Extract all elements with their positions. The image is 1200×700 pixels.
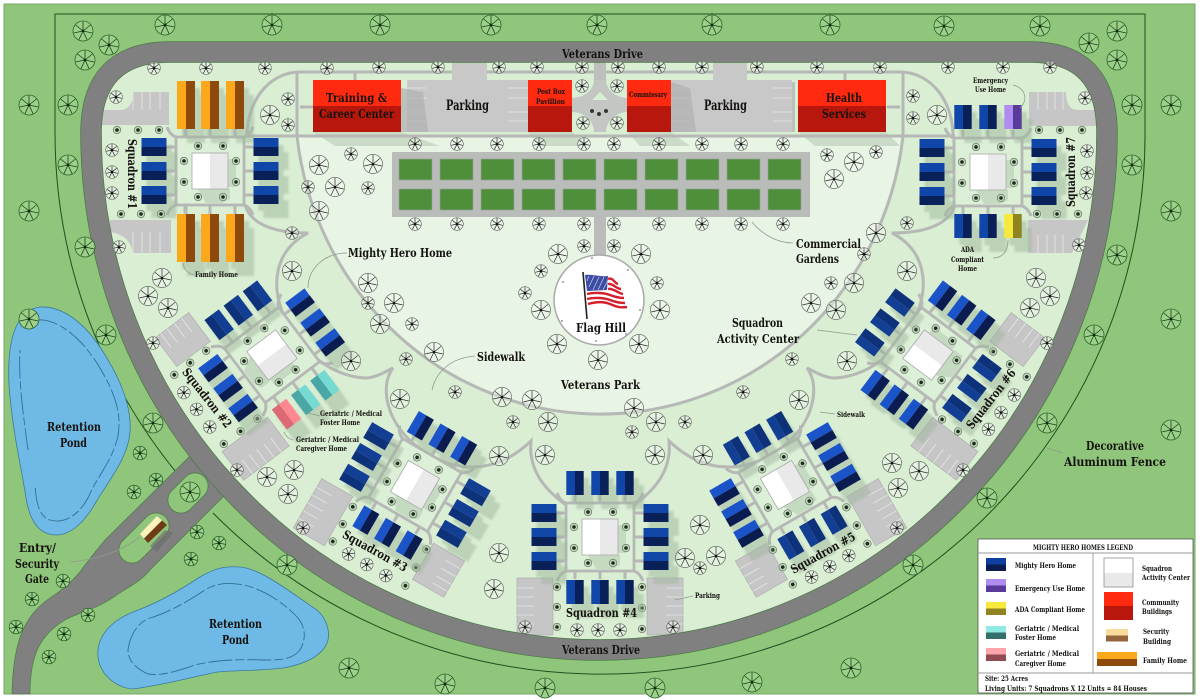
- legend item: security building: [1106, 627, 1172, 646]
- label: geriatric medical caregiver home: Caregiver Home: [296, 444, 347, 453]
- label: parking right: Parking: [704, 98, 747, 114]
- label: ada compliant home: [951, 245, 985, 273]
- security building: [140, 516, 173, 552]
- label: commercial gardens: Commercial: [796, 237, 861, 251]
- label: emergency use home: Use Home: [975, 85, 1006, 94]
- label: geriatric medical foster home: Foster Home: [320, 418, 360, 427]
- label: training and career center: Career Center: [319, 107, 395, 121]
- label: geriatric medical foster home: [320, 409, 382, 427]
- label: squadron activity center: [716, 316, 800, 346]
- label: decorative aluminum fence: [1063, 439, 1166, 469]
- label: geriatric medical caregiver home: [296, 435, 359, 453]
- label: squadron 3: Squadron #3: [340, 527, 410, 575]
- squadron 5: [693, 394, 907, 612]
- label: commissary: Commissary: [629, 90, 667, 99]
- label: emergency use home: [973, 76, 1009, 94]
- legend item: community buildings: [1104, 592, 1179, 620]
- building shadows: [313, 132, 900, 146]
- label: squadron 6: Squadron #6: [963, 366, 1019, 432]
- site lawn: [91, 52, 1107, 650]
- label: retention pond bottom: Retention: [209, 617, 262, 631]
- legend item: ada compliant home: [986, 602, 1085, 615]
- label: training and career center: [319, 91, 395, 121]
- building: post box pavillion: [528, 80, 572, 132]
- legend item: geriatric medical caregiver home: Geriatric / Medical: [1015, 649, 1079, 658]
- label: ada compliant home: ADA: [960, 245, 974, 254]
- legend footer: site summary: [985, 674, 1147, 693]
- label: post box pavillion: [536, 87, 565, 106]
- legend item: emergency use home: Emergency Use Home: [1015, 584, 1085, 593]
- legend item: family home: [1097, 652, 1187, 666]
- legend item: squadron activity center: [1104, 558, 1191, 587]
- label: sidewalk park: Sidewalk: [477, 350, 526, 364]
- label: commercial gardens: [796, 237, 861, 266]
- veterans drive road: [91, 52, 1107, 650]
- label: entry security gate: Security: [15, 557, 60, 571]
- label: ada compliant home: Home: [958, 264, 977, 273]
- label: squadron activity center: Squadron: [732, 316, 783, 330]
- label: retention pond bottom: [209, 617, 262, 647]
- legend item: geriatric medical foster home: [986, 624, 1079, 642]
- legend item: mighty hero home: Mighty Hero Home: [1015, 561, 1076, 570]
- legend item: ada compliant home: ADA Compliant Home: [1014, 605, 1085, 614]
- legend item: mighty hero home: [986, 558, 1076, 571]
- retention pond bottom: [98, 567, 329, 689]
- label: training and career center: Training &: [326, 91, 387, 105]
- label: retention pond left: Retention: [47, 420, 101, 434]
- label: parking left: Parking: [446, 98, 489, 114]
- label: squadron activity center: Activity Center: [716, 332, 800, 346]
- label: parking small: Parking: [695, 591, 721, 600]
- flag hill: [554, 255, 644, 345]
- squadron 2: [142, 261, 366, 481]
- label: post box pavillion: Pavillion: [536, 97, 565, 106]
- veterans park lawn: [297, 136, 903, 414]
- entry road: [12, 440, 245, 694]
- label: health services: Health: [826, 91, 862, 105]
- legend item: geriatric medical foster home: Geriatric / Medical: [1015, 624, 1079, 633]
- label: family home: Family Home: [195, 270, 238, 279]
- main sidewalks: [245, 72, 955, 505]
- entry islands: [132, 486, 195, 550]
- legend item: geriatric medical caregiver home: [986, 648, 1079, 668]
- label: ada compliant home: Compliant: [951, 255, 985, 264]
- label: geriatric medical caregiver home: Geriatric / Medical: [296, 435, 359, 444]
- legend item: geriatric medical caregiver home: Caregiver Home: [1015, 659, 1066, 668]
- label: entry security gate: [15, 541, 60, 586]
- legend footer: site summary: Living Units: 7 Squadrons X 12 Units = 84 Houses: [985, 684, 1147, 693]
- legend item: security building: Building: [1143, 637, 1172, 646]
- trees on site lawn: [110, 61, 1091, 633]
- retention pond left: [9, 307, 130, 535]
- squadron 4: [517, 471, 683, 636]
- squadron 3: [293, 394, 507, 612]
- squadron 6: [834, 261, 1058, 481]
- label: entry security gate: Gate: [25, 572, 49, 586]
- legend title: MIGHTY HERO HOMES LEGEND: [1033, 543, 1133, 552]
- label: decorative aluminum fence: Aluminum Fence: [1063, 455, 1166, 469]
- legend footer: site summary: Site: 25 Acres: [985, 674, 1028, 683]
- label: retention pond left: [47, 420, 101, 450]
- building: training and career center: [313, 80, 401, 132]
- label: squadron 1: Squadron #1: [125, 139, 139, 209]
- text: flag hill: Flag Hill: [576, 321, 626, 335]
- label: post box pavillion: Post Box: [537, 87, 565, 96]
- label: decorative aluminum fence: Decorative: [1086, 439, 1144, 453]
- legend item: security building: Security: [1143, 627, 1169, 636]
- parking lots top: [401, 62, 795, 132]
- label: commercial gardens: Gardens: [796, 252, 839, 266]
- trees in park: [302, 138, 886, 438]
- road label: veterans drive top: Veterans Drive: [561, 47, 643, 61]
- label: health services: Services: [822, 107, 866, 121]
- legend item: community buildings: Community: [1142, 598, 1179, 607]
- label: retention pond bottom: Pond: [222, 633, 249, 647]
- callout leader lines: [70, 85, 1063, 600]
- label: veterans park: Veterans Park: [560, 378, 641, 392]
- label: squadron 7: Squadron #7: [1064, 137, 1078, 207]
- legend item: squadron activity center: Squadron: [1142, 564, 1172, 573]
- commercial gardens: [392, 152, 810, 258]
- label: squadron 5: Squadron #5: [788, 529, 858, 577]
- building: health services: [798, 80, 886, 132]
- label: retention pond left: Pond: [60, 436, 87, 450]
- label: squadron 2: Squadron #2: [179, 365, 235, 431]
- squadron 1: [102, 81, 278, 262]
- label: emergency use home: Emergency: [973, 76, 1009, 85]
- label: entry security gate: Entry/: [19, 541, 57, 555]
- label: sidewalk small: Sidewalk: [837, 410, 866, 419]
- label: geriatric medical foster home: Geriatric / Medical: [320, 409, 382, 418]
- legend item: family home: Family Home: [1143, 656, 1187, 665]
- legend item: community buildings: Buildings: [1142, 607, 1172, 616]
- icon: american flag: [583, 272, 627, 319]
- legend item: emergency use home: [986, 579, 1085, 593]
- panel: legend: [978, 539, 1193, 693]
- road label: veterans drive bottom: Veterans Drive: [561, 643, 640, 657]
- label: mighty hero home: Mighty Hero Home: [348, 246, 452, 260]
- label: health services: [822, 91, 866, 121]
- legend item: geriatric medical foster home: Foster Home: [1015, 633, 1056, 642]
- squadron 7: [920, 92, 1097, 253]
- central plaza: [572, 62, 627, 132]
- building: commissary: [627, 80, 671, 132]
- label: squadron 4: Squadron #4: [566, 606, 637, 620]
